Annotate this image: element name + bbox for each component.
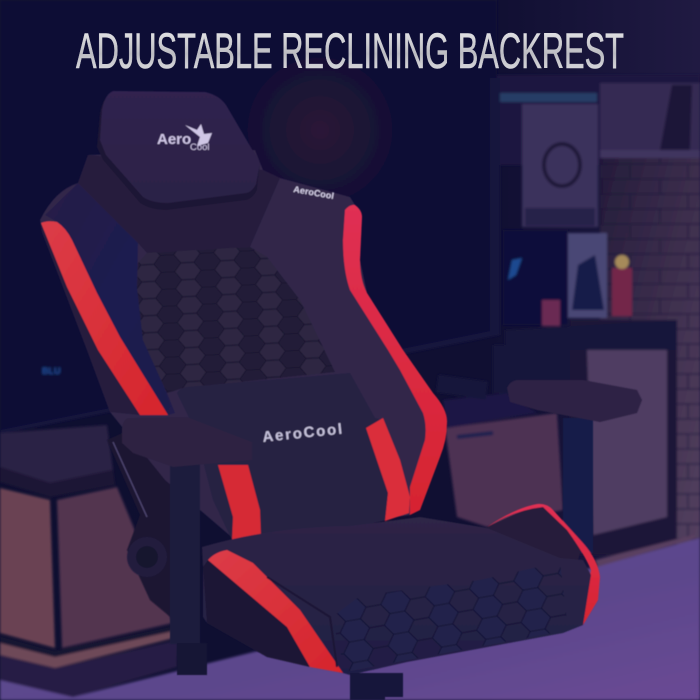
tv stand box	[493, 345, 573, 393]
chair base stem	[350, 673, 403, 700]
left blue side panel	[45, 183, 175, 415]
brick wall	[600, 157, 700, 547]
headrest pillow	[97, 91, 260, 210]
seat honeycomb	[332, 562, 568, 672]
backrest brand label: AeroCool	[293, 184, 335, 201]
headrest logo second line: Cool	[190, 142, 210, 153]
upper band below headrest	[78, 155, 280, 253]
skirting strip	[595, 535, 697, 567]
left armrest	[122, 417, 252, 675]
figurines	[542, 255, 632, 326]
left red side bolster	[41, 221, 168, 415]
tilt mechanism	[107, 425, 180, 625]
lumbar right red stripe	[366, 418, 410, 521]
backrest base	[40, 150, 447, 540]
hexagon center panel	[137, 247, 335, 393]
blue shelf strip	[500, 93, 597, 102]
brick wall shading	[600, 157, 700, 547]
right armrest	[507, 380, 642, 553]
television	[0, 0, 497, 432]
right cabinet	[436, 375, 563, 527]
tv logo: BLU	[42, 366, 60, 376]
headrest logo mark	[185, 124, 212, 146]
upper right wall	[497, 75, 700, 165]
seat side shell	[203, 560, 310, 667]
seat left red stripe	[208, 550, 343, 673]
wing shell strip	[41, 223, 140, 415]
seat cushion	[202, 517, 591, 675]
chair	[40, 91, 642, 700]
lumbar brand text: AeroCool	[262, 421, 343, 446]
tv stand edge	[0, 78, 500, 434]
headrest logo: Aero	[157, 131, 191, 148]
framed poster	[522, 104, 598, 227]
seat seam	[267, 577, 337, 667]
wall shelf display	[600, 83, 700, 158]
game boxes	[503, 230, 607, 325]
tv screen reflection glow	[230, 40, 410, 220]
lumbar left red stripe	[218, 465, 261, 540]
left cabinet	[0, 425, 178, 697]
right seat wing	[487, 504, 600, 625]
right red side bolster	[343, 205, 447, 515]
glass side table	[505, 320, 677, 555]
lumbar pillow	[177, 373, 410, 540]
floor	[0, 538, 700, 700]
